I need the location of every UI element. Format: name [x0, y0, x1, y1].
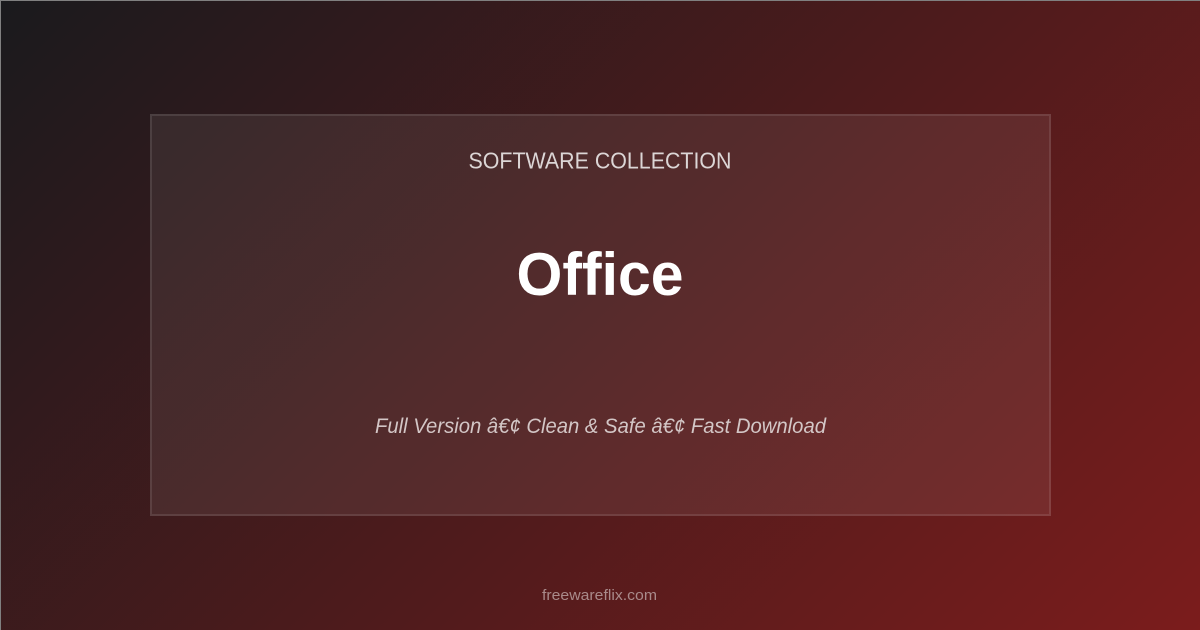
title: Office	[516, 241, 684, 308]
tagline: Full Version â€¢ Clean & Safe â€¢ Fast Download	[375, 415, 827, 438]
footer site name: freewareflix.com	[542, 587, 657, 604]
panel: title card	[150, 114, 1051, 516]
eyebrow heading: SOFTWARE COLLECTION	[468, 148, 732, 174]
